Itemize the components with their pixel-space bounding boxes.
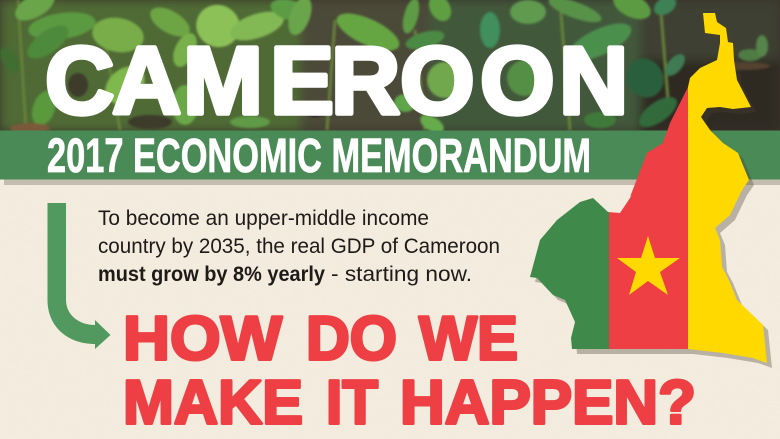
- green subtitle band: [0, 130, 780, 180]
- word: WE: WE: [419, 304, 518, 374]
- word: DO: DO: [306, 304, 397, 374]
- line 3 regular: - starting now.: [331, 263, 472, 286]
- photo: green plants: [0, 0, 780, 137]
- intro text: [98, 207, 500, 286]
- heading: How do we make it happen?: [123, 304, 696, 438]
- line 1: To become an upper-middle income: [98, 207, 429, 230]
- word: HOW: HOW: [123, 304, 282, 374]
- map of Cameroon in flag colours: [530, 13, 772, 368]
- band shadow: [4, 179, 780, 185]
- line 2: country by 2035, the real GDP of Cameroon: [98, 235, 500, 258]
- word: IT: IT: [326, 368, 378, 438]
- star: [617, 236, 680, 295]
- line 3 bold: must grow by 8% yearly: [98, 263, 325, 286]
- word: HAPPEN?: HAPPEN?: [400, 368, 696, 438]
- map shadow: [535, 18, 772, 368]
- title: CAMEROON: CAMEROON: [45, 28, 628, 134]
- flag stripes clipped to the country shape: [530, 13, 767, 363]
- word: MAKE: MAKE: [123, 368, 303, 438]
- arrow: down and right to the question: [48, 203, 110, 349]
